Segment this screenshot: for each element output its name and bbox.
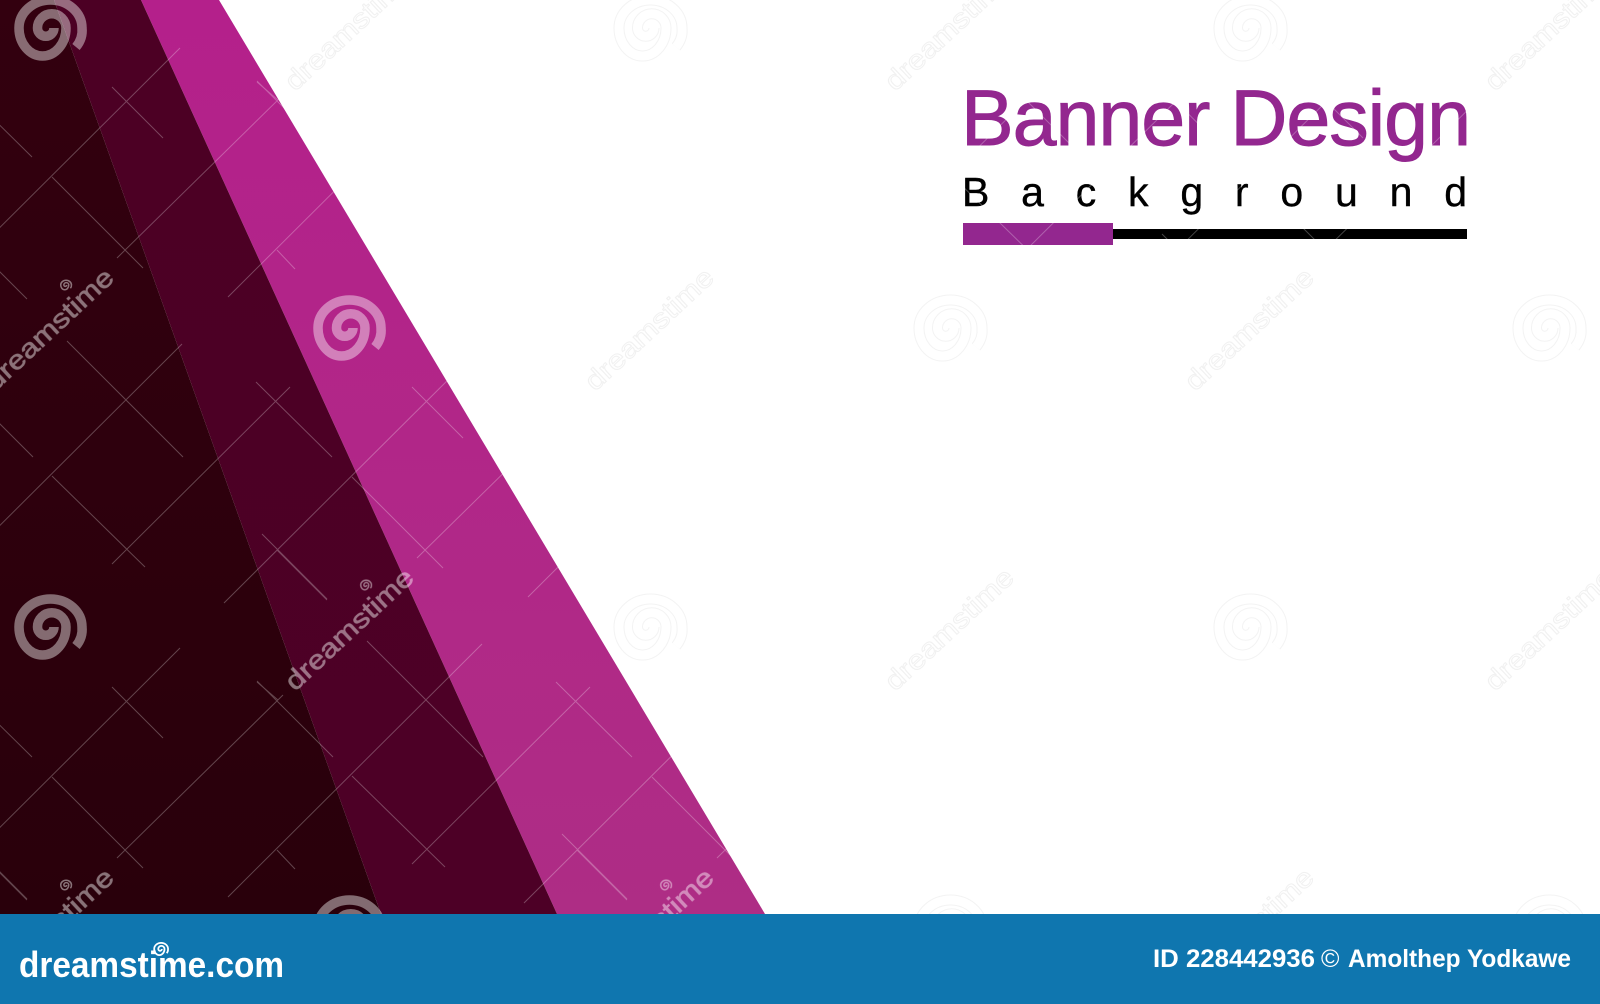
heading: Banner Design: Banner Design: [961, 73, 1471, 162]
footer bar: [0, 914, 1600, 1004]
panel: pink diagonal stripe: [141, 0, 765, 914]
icon: footer logo spiral: [154, 943, 168, 955]
watermark: text on white: dreamstime: [579, 262, 720, 396]
watermark: text on coloured stripes: [0, 262, 720, 996]
footer credit: ID 228442936: [1153, 945, 1315, 973]
watermark: text on coloured stripes: dreamstime: [579, 862, 720, 996]
underline: black rule: [1112, 229, 1467, 239]
watermark: spirals on coloured stripes: [19, 0, 381, 956]
watermark: text on white: dreamstime: [879, 562, 1020, 696]
watermark: text on coloured stripes: dreamstime: [279, 562, 420, 696]
footer credit: Amolthep Yodkawe: [1348, 945, 1571, 973]
underline: purple accent bar: [963, 223, 1113, 245]
watermark: text on white: dreamstime: [1479, 562, 1600, 696]
footer logo: dreamstime.com: dreamstime.com: [19, 944, 284, 985]
footer credit: [1153, 945, 1571, 973]
watermark: text on white: dreamstime: [1179, 262, 1320, 396]
panel: dark diagonal stripe: [0, 0, 381, 914]
footer credit: ©: [1321, 945, 1340, 973]
watermark: text on white: dreamstime: [1179, 862, 1320, 996]
watermark: small spirals above text: [61, 280, 671, 890]
subheading: Background: Background: [962, 169, 1467, 215]
watermark: spirals on white: [619, 0, 1581, 956]
panel: maroon diagonal stripe: [54, 0, 557, 914]
